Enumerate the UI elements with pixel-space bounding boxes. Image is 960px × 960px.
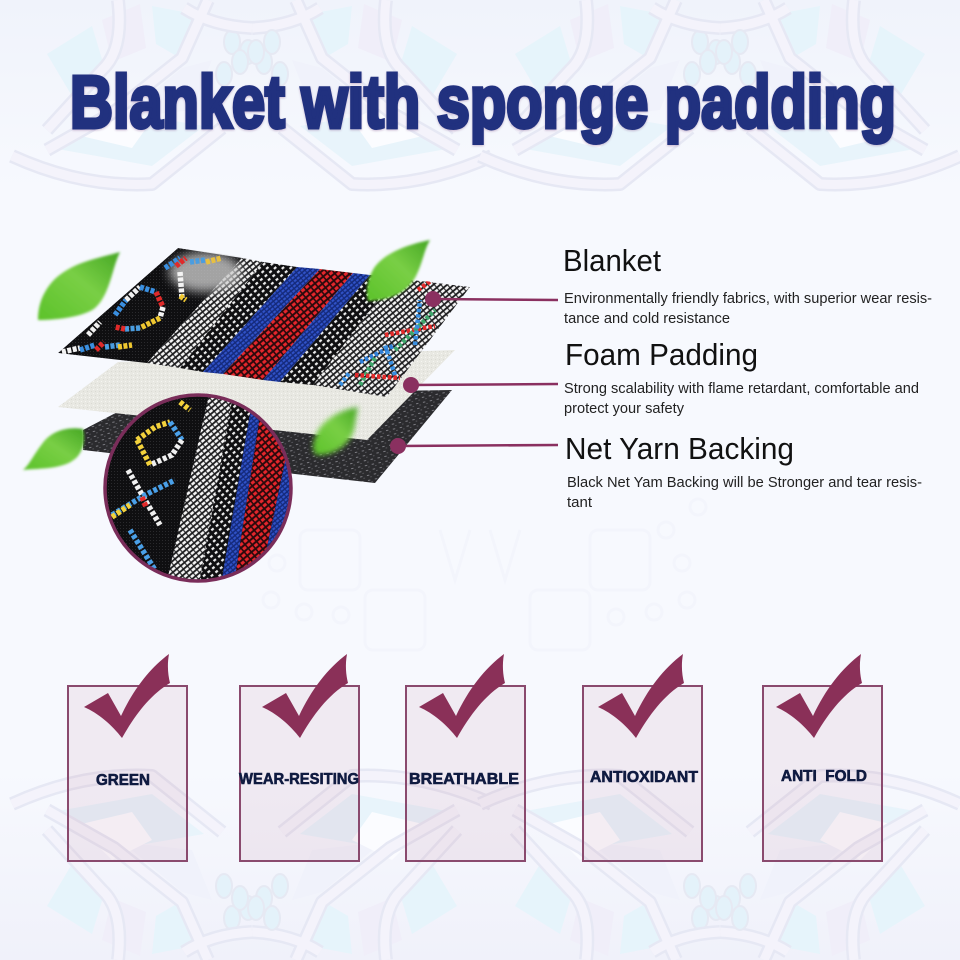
feature card: green [68, 654, 187, 861]
feature card: breathable [406, 654, 525, 861]
smoke haze [169, 252, 241, 292]
text block: foam padding: Strong scalability with flame retardant, comfortable and [564, 380, 919, 397]
leaf: upper left [38, 252, 120, 320]
text block: foam padding [564, 337, 919, 417]
diamond motif [62, 258, 222, 352]
feature card: antioxidant [583, 654, 702, 861]
feature card: wear-resiting [239, 654, 359, 861]
text block: foam padding: protect your safety [564, 400, 684, 417]
layer: net yarn backing [83, 390, 452, 483]
feature card: wear-resiting: WEAR-RESITING [239, 771, 359, 788]
layer: foam padding [58, 350, 455, 440]
leaf: center [313, 407, 358, 455]
leaf: upper right [367, 240, 430, 301]
text block: blanket: Blanket [563, 243, 661, 278]
feature card: anti fold [763, 654, 882, 861]
feature card: anti fold: ANTI FOLD [781, 768, 867, 785]
illustration: blanket layers [23, 240, 470, 590]
text block: net yarn backing: Net Yarn Backing [565, 431, 794, 466]
layer: blanket fabric [58, 248, 470, 397]
text block: net yarn backing: tant [567, 494, 593, 511]
text block: blanket [563, 243, 932, 327]
text block: foam padding: Foam Padding [565, 337, 758, 372]
feature card: antioxidant: ANTIOXIDANT [590, 769, 699, 786]
callout line: net yarn backing [390, 438, 558, 454]
magnifier circle [103, 393, 293, 583]
callout line: foam padding [403, 377, 558, 393]
callout line: blanket [425, 291, 558, 307]
text block: net yarn backing [565, 431, 922, 511]
colored stitch motif [340, 280, 435, 385]
text block: blanket: tance and cold resistance [564, 310, 730, 327]
text block: net yarn backing: Black Net Yam Backing will be Stronger and tear resis- [567, 474, 922, 491]
text block: blanket: Environmentally friendly fabrics, with superior wear resis- [564, 290, 932, 307]
feature card: breathable: BREATHABLE [409, 771, 519, 788]
feature card: green: GREEN [96, 772, 150, 789]
leaf: lower left [23, 428, 84, 470]
motif stitches [112, 402, 190, 570]
